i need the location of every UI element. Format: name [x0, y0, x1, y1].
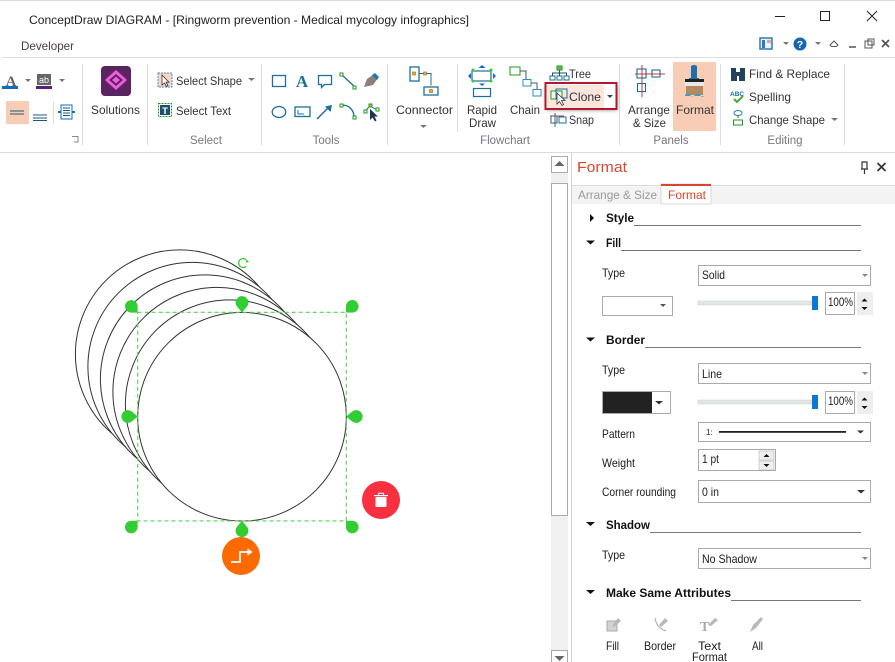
button: Clone, highlighted: Clone [569, 90, 601, 104]
ribbon borders [0, 57, 895, 153]
section: Shadow: Type [602, 548, 625, 562]
panel: Format [572, 159, 895, 662]
ribbon group: Editing [730, 67, 838, 147]
icon: Rapid Draw: Rapid [467, 103, 497, 117]
section: Border [586, 333, 873, 502]
icon: text format: Text [698, 639, 722, 653]
ribbon button: Solutions [91, 66, 140, 117]
button: delete [362, 481, 400, 519]
section: Border: Pattern [602, 427, 635, 441]
section: Style: Style [606, 211, 634, 225]
button: Find and Replace: Find & Replace [749, 67, 830, 81]
section: Border: 1 pt [702, 452, 720, 466]
canvas scrollbar [551, 156, 568, 662]
ribbon group: Flowchart: Flowchart [480, 135, 531, 147]
section: Fill: Type [602, 266, 625, 280]
title bar [29, 11, 877, 27]
ribbon button: Solutions: Solutions [91, 103, 140, 117]
icon: fill: Fill [606, 639, 619, 653]
icon: fill [606, 618, 621, 653]
ribbon group: Select: Select Shape [176, 74, 242, 88]
button: Spelling [730, 90, 791, 104]
section: Shadow: Shadow [606, 518, 651, 532]
ribbon button: Connector: Connector [396, 103, 453, 117]
section: Border: 100% [828, 394, 853, 408]
selection handles [121, 296, 363, 537]
canvas: cloned circles with selection [75, 250, 400, 575]
window controls [775, 11, 877, 21]
icon: Arrange and Size: & Size [633, 116, 666, 130]
section: Border: 0 in [702, 485, 719, 499]
ribbon tab: Developer: Developer [21, 39, 74, 53]
ribbon group: Select [158, 73, 255, 147]
button: Change Shape: Change Shape [749, 113, 825, 127]
ribbon help icons: ? [797, 39, 803, 51]
section: Border: Corner rounding [602, 485, 676, 499]
icon: Chain: Chain [510, 103, 540, 117]
cloned circles [75, 250, 346, 521]
icon: all: All [752, 639, 763, 653]
ribbon group: Select: Select Text [176, 104, 232, 118]
ribbon button: Connector [396, 67, 453, 128]
icon: all [750, 617, 763, 653]
button: connector [222, 537, 260, 575]
ribbon group: text format: ab [39, 75, 49, 85]
icon: text format [692, 618, 728, 662]
ribbon group: Tools: A [296, 72, 309, 91]
icon: border: Border [644, 639, 676, 653]
section: Fill: Solid [702, 268, 725, 282]
section: Fill: 100% [828, 295, 853, 309]
section: Fill: Fill [606, 236, 621, 250]
section: Shadow: No Shadow [702, 552, 757, 566]
ribbon group: Panels [628, 62, 716, 147]
section: Border: 1: [706, 428, 713, 437]
icon: border [644, 618, 676, 653]
section: Border: Border [606, 333, 645, 347]
section: Make Same Attributes [586, 586, 861, 662]
ribbon group: Tools [272, 72, 379, 147]
ribbon group: Editing: Editing [767, 135, 803, 147]
button: Clone, highlighted [546, 83, 617, 109]
button: Spelling: Spelling [749, 90, 791, 104]
ribbon group: Panels: Panels [653, 135, 689, 147]
tabs [572, 184, 895, 204]
button: Snap [550, 113, 594, 127]
window title: ConceptDraw DIAGRAM - [Ringworm prevention - Medical mycology infographics] [29, 13, 469, 27]
ribbon group: Tools: Tools [313, 135, 340, 147]
section: Border: Weight [602, 456, 636, 470]
button: Tree [550, 66, 591, 81]
section: Fill [586, 236, 873, 316]
panel title: Format [577, 159, 628, 176]
ribbon group: Flowchart [467, 65, 617, 147]
selection frame [138, 312, 346, 521]
icon: Chain [510, 67, 541, 117]
icon: Arrange and Size: Arrange [628, 103, 670, 117]
ribbon group: text format: A [6, 74, 17, 90]
button: Format, active: Format [676, 103, 715, 117]
tabs: Format [668, 188, 707, 202]
tabs: Arrange & Size [578, 188, 657, 202]
button: Snap: Snap [569, 113, 594, 127]
button: Tree: Tree [569, 67, 591, 81]
ribbon group: text format [2, 74, 78, 142]
ribbon group: Select: Select [190, 135, 223, 147]
pin and close icons [861, 162, 886, 174]
icon: Rapid Draw [467, 65, 497, 130]
icon: Arrange and Size [628, 65, 670, 130]
ribbon help icons [760, 38, 889, 51]
icon: Rapid Draw: Draw [469, 116, 496, 130]
section: Border: Line [702, 367, 722, 381]
section: Border: Type [602, 363, 625, 377]
section: Make Same Attributes: Make Same Attributes [606, 586, 731, 600]
section: Style [590, 211, 861, 226]
icon: text format: T [700, 620, 710, 635]
rotate handle [239, 258, 249, 268]
button: Spelling: ABC [730, 91, 744, 98]
ribbon group: Select: T [162, 106, 168, 117]
section: Shadow [586, 518, 870, 568]
